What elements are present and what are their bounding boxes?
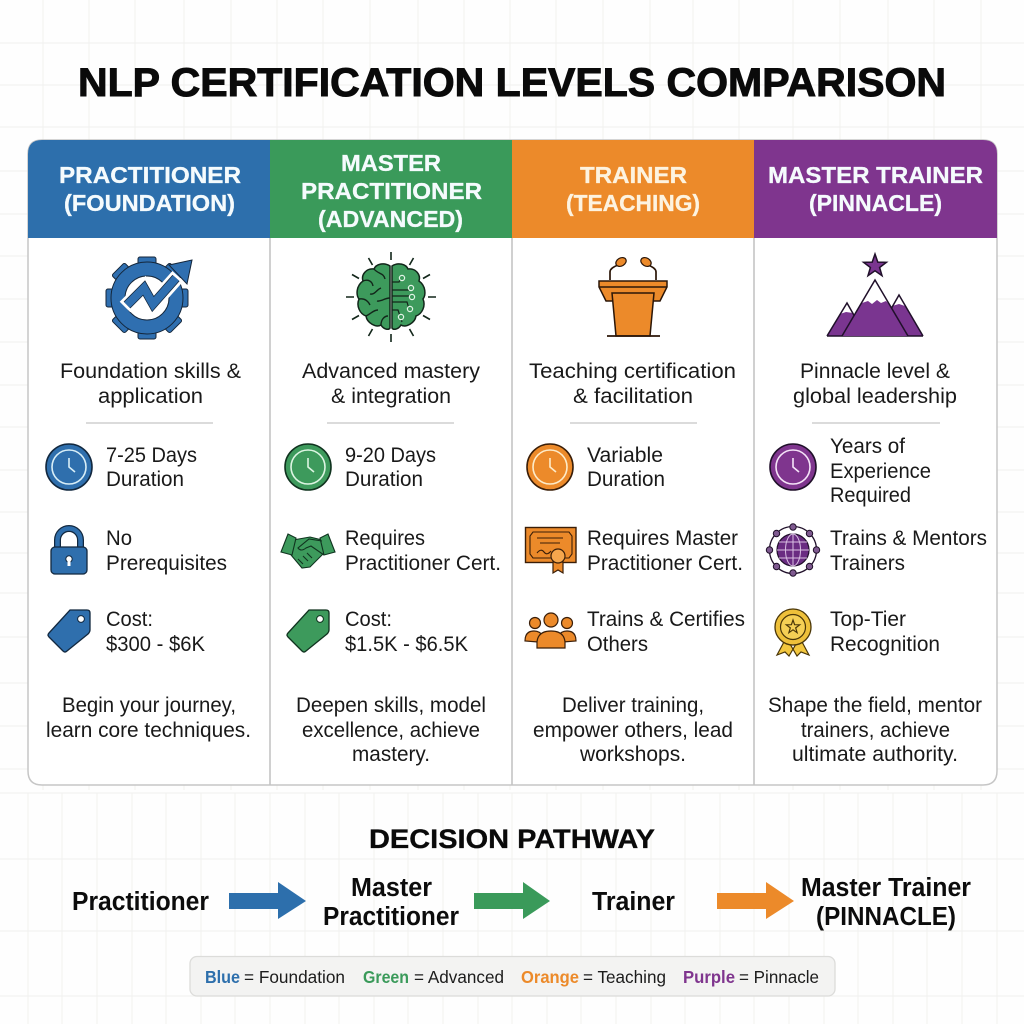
cost [106, 607, 206, 656]
header: trainer: TRAINER [580, 162, 687, 188]
header: trainer: (TEACHING) [566, 190, 700, 216]
pathway step: practitioner: Practitioner [72, 888, 209, 916]
prerequisites: Practitioner Cert. [587, 551, 743, 575]
legend: orange: Orange [521, 967, 579, 987]
legend: blue: Blue [205, 967, 240, 987]
legend: purple: = Pinnacle [739, 967, 819, 987]
summary: workshops. [579, 742, 686, 766]
experience: Required [830, 483, 911, 507]
others [587, 607, 745, 656]
pathway step: master trainer [801, 874, 971, 931]
description: application [98, 384, 203, 408]
description: & integration [331, 384, 451, 408]
description [302, 359, 480, 408]
header: trainer [512, 140, 754, 238]
cost: Cost: [106, 607, 153, 631]
description [529, 359, 736, 408]
header: master trainer: MASTER TRAINER [768, 162, 983, 188]
prerequisites [106, 526, 227, 575]
legend: purple [683, 967, 819, 987]
recognition [830, 607, 940, 656]
icon: certificate [526, 528, 576, 573]
title: NLP CERTIFICATION LEVELS COMPARISON [78, 61, 946, 105]
icon: clock [285, 444, 331, 490]
summary: Deliver training, [562, 693, 704, 717]
description: Foundation skills & [60, 359, 241, 383]
icon: group of people [525, 613, 576, 648]
duration [587, 443, 665, 491]
experience [830, 434, 931, 507]
panel: master trainer column [754, 140, 997, 766]
description [60, 359, 241, 408]
icon: price tag [287, 610, 329, 652]
description: Pinnacle level & [800, 359, 950, 383]
legend: blue: = Foundation [244, 967, 345, 987]
pathway step: master practitioner [323, 874, 459, 931]
legend: purple: Purple [683, 967, 735, 987]
header: master practitioner [270, 140, 512, 238]
prerequisites [587, 526, 743, 575]
legend: orange [521, 967, 666, 987]
recognition: Top-Tier [830, 607, 906, 631]
experience: Years of [830, 434, 905, 458]
header: master practitioner: (ADVANCED) [318, 206, 463, 232]
mentoring: Trains & Mentors [830, 526, 987, 550]
icon: handshake [281, 534, 335, 568]
pathway step: master practitioner: Practitioner [323, 903, 459, 931]
cost [345, 607, 469, 656]
duration [106, 443, 197, 491]
prerequisites: No [106, 526, 132, 550]
summary [46, 693, 251, 742]
header: practitioner: PRACTITIONER [59, 162, 241, 188]
description: & facilitation [573, 384, 693, 408]
icon: brain with circuits [346, 252, 436, 342]
pathway step: master practitioner: Master [351, 874, 432, 902]
prerequisites [345, 526, 501, 575]
others: Others [587, 632, 648, 656]
icon: globe network [766, 524, 820, 576]
header: practitioner: (FOUNDATION) [64, 190, 235, 216]
summary [533, 693, 733, 766]
mentoring: Trainers [830, 551, 905, 575]
description: Teaching certification [529, 359, 736, 383]
legend: green: Green [363, 967, 409, 987]
summary: Begin your journey, [62, 693, 236, 717]
arrow: blue [229, 882, 306, 919]
duration: Variable [587, 443, 663, 467]
pathway step: trainer: Trainer [592, 888, 675, 916]
mentoring [830, 526, 987, 575]
header: practitioner [28, 140, 270, 238]
arrow: orange [717, 882, 794, 919]
prerequisites: Prerequisites [106, 551, 227, 575]
description: Advanced mastery [302, 359, 480, 383]
summary: Deepen skills, model [296, 693, 486, 717]
summary: excellence, achieve [302, 718, 480, 742]
duration: 7-25 Days [106, 443, 197, 467]
summary: ultimate authority. [792, 742, 958, 766]
duration: Duration [587, 467, 665, 491]
icon: clock [46, 444, 92, 490]
description: global leadership [793, 384, 957, 408]
duration: Duration [106, 467, 184, 491]
description [793, 359, 957, 408]
pathway step: master trainer: (PINNACLE) [816, 903, 956, 931]
pathway step: master trainer: Master Trainer [801, 874, 971, 902]
duration [345, 443, 436, 491]
recognition: Recognition [830, 632, 940, 656]
summary: mastery. [352, 742, 430, 766]
experience: Experience [830, 459, 931, 483]
summary: empower others, lead [533, 718, 733, 742]
summary [768, 693, 982, 766]
icon: podium with microphones [599, 256, 667, 336]
arrow: green [474, 882, 550, 919]
legend [190, 956, 835, 996]
panel: master practitioner column [270, 140, 512, 766]
summary: Shape the field, mentor [768, 693, 982, 717]
duration: Duration [345, 467, 423, 491]
panel: practitioner column [28, 140, 270, 742]
icon: mountain with star [827, 254, 923, 336]
icon: clock [770, 444, 816, 490]
prerequisites: Requires [345, 526, 425, 550]
others: Trains & Certifies [587, 607, 745, 631]
comparison table [28, 140, 997, 785]
icon: price tag [48, 610, 90, 652]
decision pathway heading: DECISION PATHWAY [369, 824, 655, 854]
icon: award rosette [775, 609, 811, 656]
icon: padlock [51, 528, 87, 574]
header: master practitioner: PRACTITIONER [301, 178, 482, 204]
header: master trainer: (PINNACLE) [809, 190, 942, 216]
prerequisites: Requires Master [587, 526, 738, 550]
legend: green: = Advanced [414, 967, 504, 987]
legend: orange: = Teaching [583, 967, 666, 987]
icon: gear with rising arrow [106, 257, 192, 339]
duration: 9-20 Days [345, 443, 436, 467]
panel: trainer column [512, 140, 754, 766]
cost: $1.5K - $6.5K [345, 632, 469, 656]
cost: $300 - $6K [106, 632, 206, 656]
summary [296, 693, 486, 766]
header: master practitioner: MASTER [341, 150, 441, 176]
cost: Cost: [345, 607, 392, 631]
summary: learn core techniques. [46, 718, 251, 742]
prerequisites: Practitioner Cert. [345, 551, 501, 575]
summary: trainers, achieve [801, 718, 950, 742]
header: master trainer [754, 140, 997, 238]
legend: green [363, 967, 504, 987]
icon: clock [527, 444, 573, 490]
